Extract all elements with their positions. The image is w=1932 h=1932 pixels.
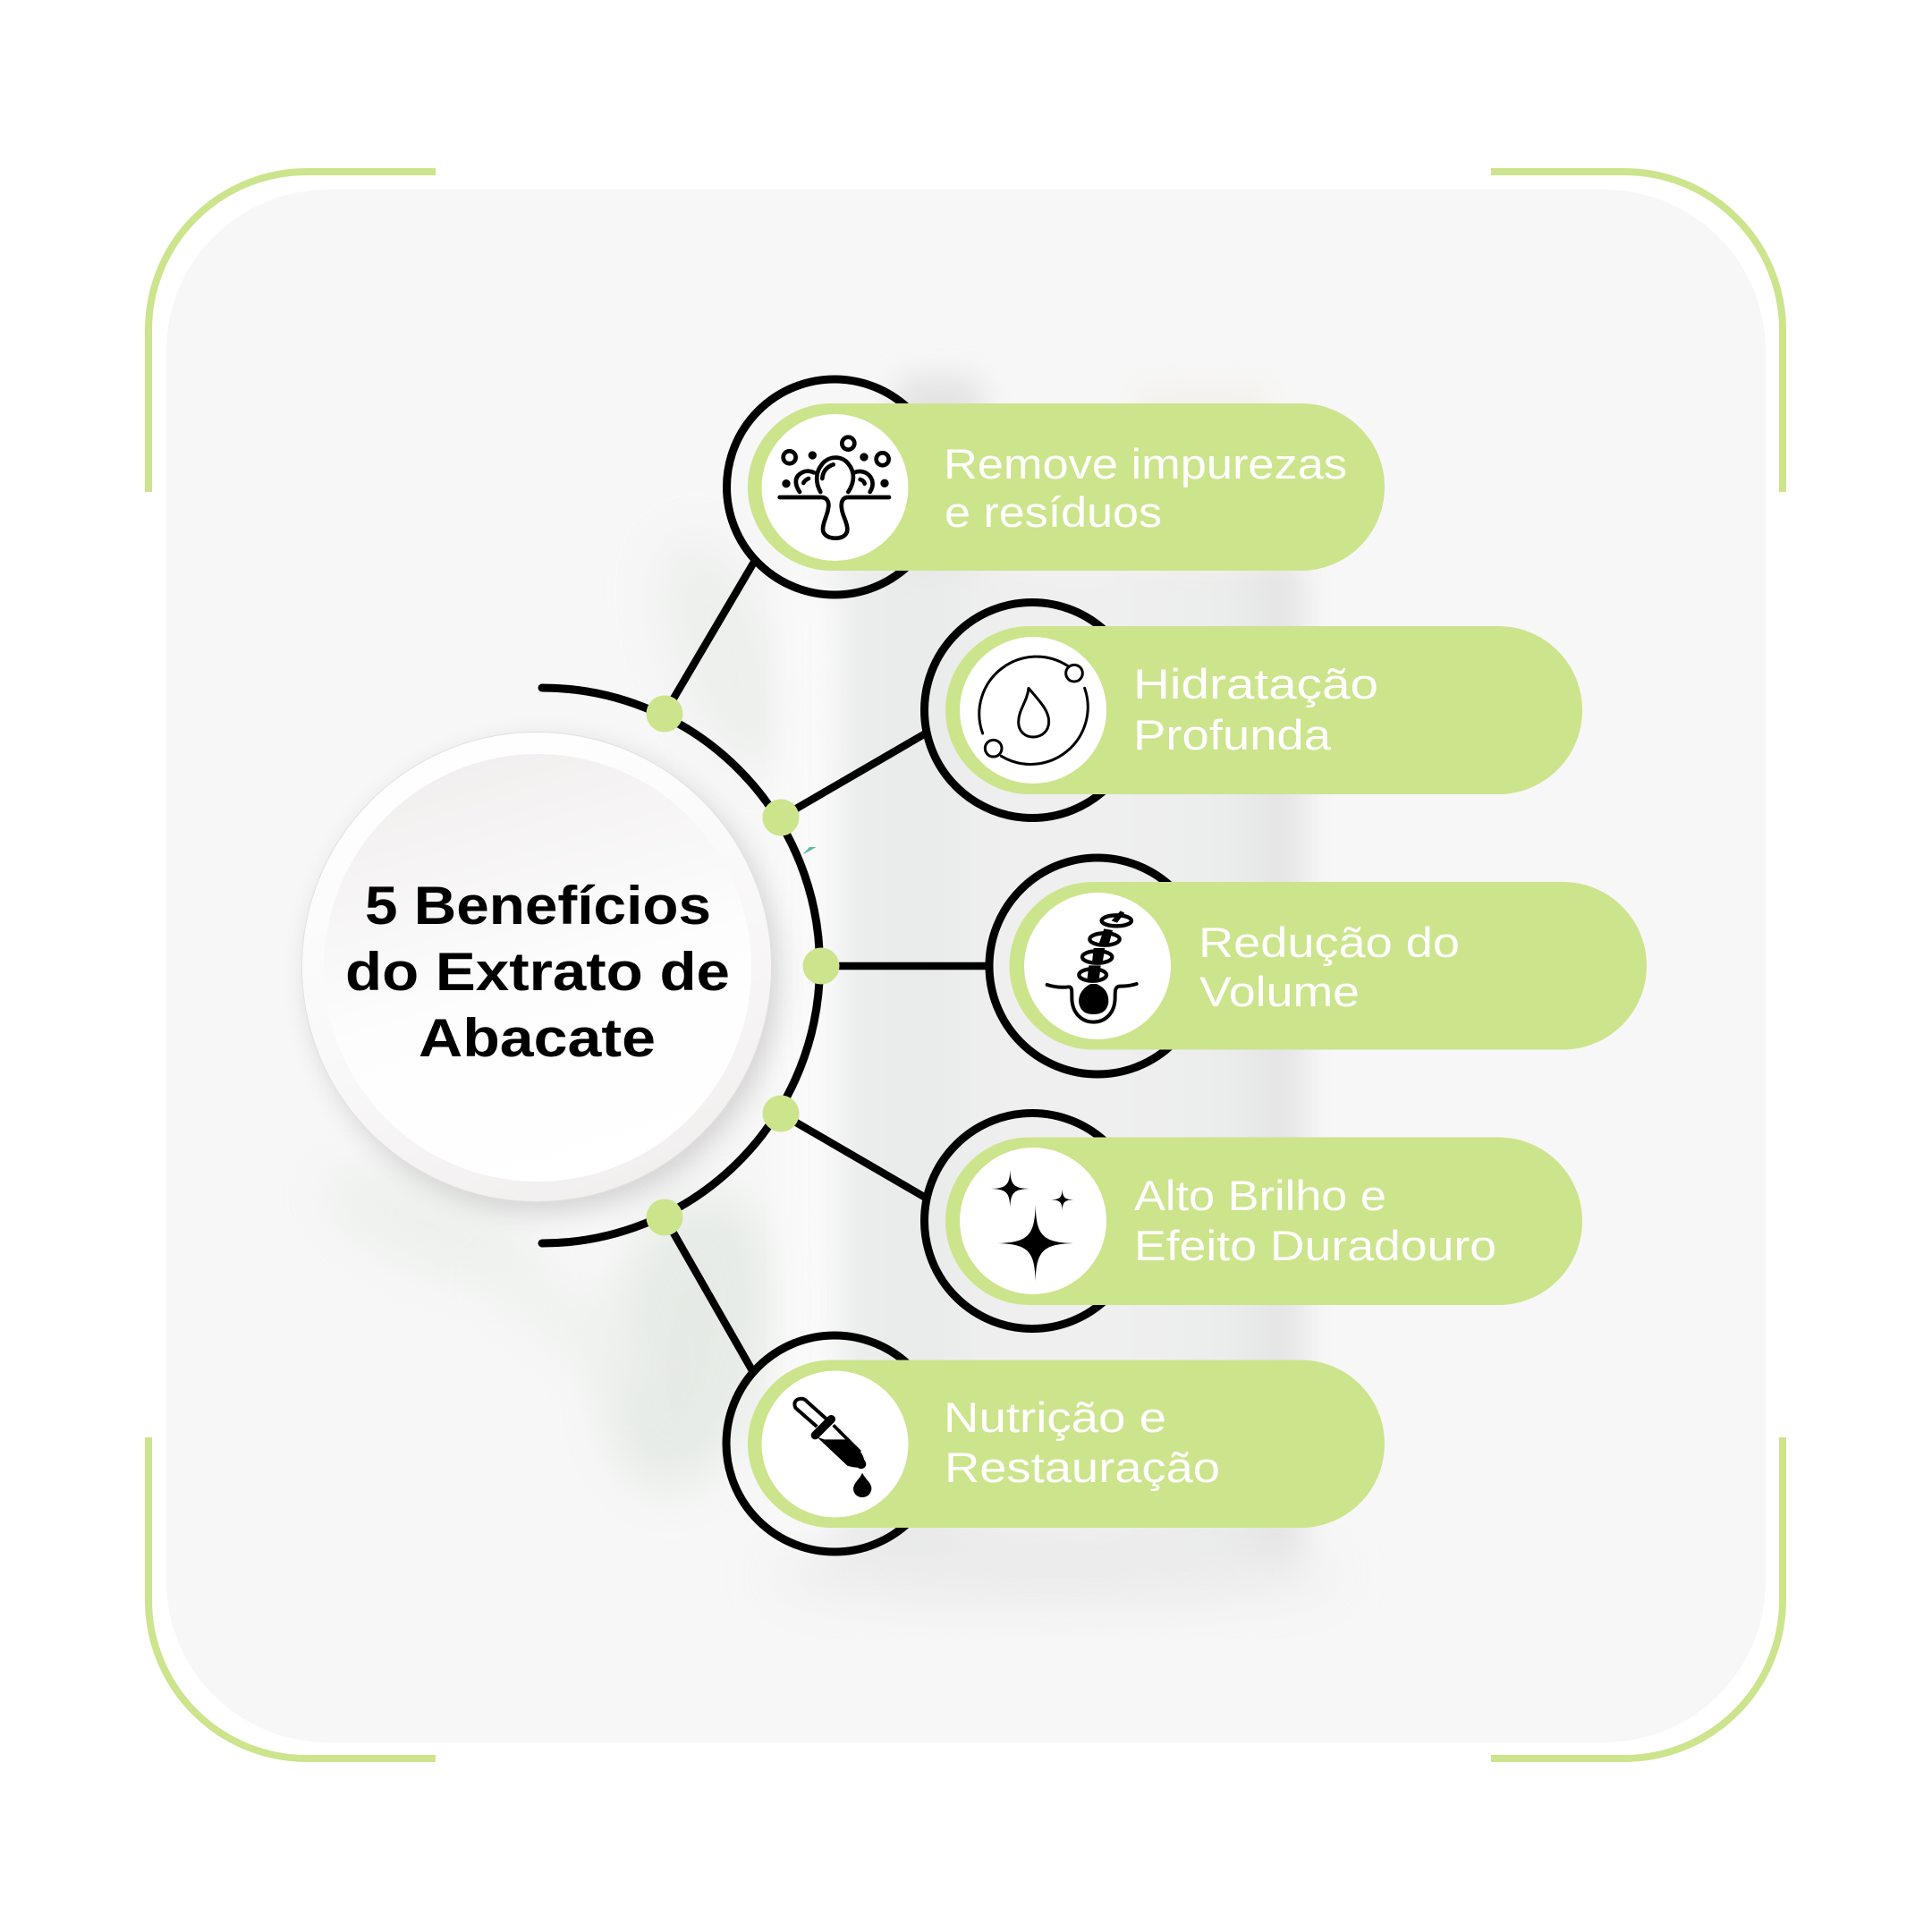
central circle: [302, 732, 778, 1211]
infographic canvas: [145, 168, 1786, 1762]
label: reducao do volume: Redução do: [1199, 919, 1460, 966]
label: alto brilho: [1134, 1172, 1496, 1269]
label: nutricao: [944, 1394, 1220, 1491]
icon: hair follicle: [1047, 911, 1137, 1022]
teal mark: [803, 847, 817, 854]
label: reducao do volume: [1199, 919, 1460, 1015]
connector arc and branches: [542, 564, 989, 1372]
item 2: hidratacao: [925, 603, 1582, 818]
item 5: nutricao: [726, 1335, 1385, 1552]
label: nutricao: Restauração: [945, 1444, 1220, 1491]
icon: water drop with orbit: [979, 657, 1088, 764]
title: [345, 876, 730, 1068]
label: reducao do volume: Volume: [1199, 968, 1360, 1015]
connector dots: [646, 696, 839, 1236]
background panel: [268, 343, 1385, 1639]
label: alto brilho: Efeito Duradouro: [1134, 1222, 1496, 1269]
icon: dropper: [794, 1399, 871, 1497]
label: remove impurezas: [944, 440, 1347, 536]
title: do Extrato de: [345, 942, 730, 1002]
label: nutricao: Nutrição e: [944, 1394, 1166, 1441]
label: hidratacao: [1133, 660, 1378, 758]
title: 5 Benefícios: [365, 876, 711, 936]
label: hidratacao: Hidratação: [1133, 660, 1378, 708]
label: remove impurezas: Remove impurezas: [944, 440, 1347, 487]
item 1: remove impurezas: [726, 379, 1385, 595]
item 3: reducao do volume: [989, 858, 1647, 1074]
label: remove impurezas: e resíduos: [945, 488, 1162, 536]
title: Abacate: [419, 1008, 656, 1068]
icon: sparkles: [991, 1169, 1073, 1282]
decorative corner frame: [148, 172, 1783, 1758]
icon: bubbles and drip: [780, 437, 889, 538]
item 4: alto brilho: [925, 1113, 1582, 1329]
label: alto brilho: Alto Brilho e: [1134, 1172, 1386, 1219]
label: hidratacao: Profunda: [1133, 711, 1332, 758]
